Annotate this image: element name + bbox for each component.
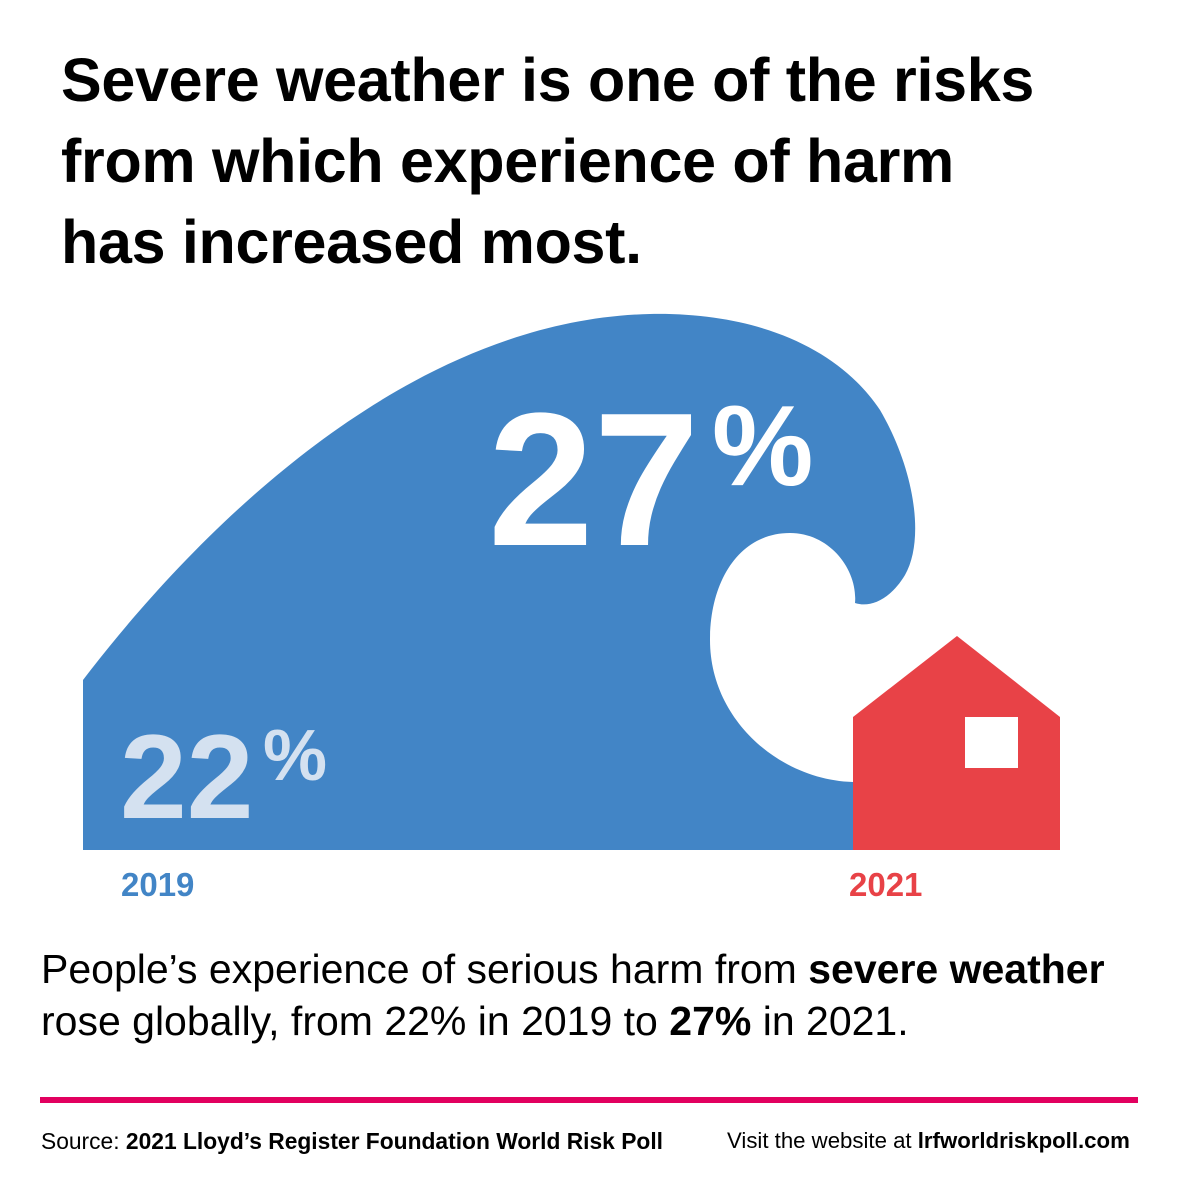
title: from which experience of harm (61, 127, 954, 195)
body text: People’s experience of serious harm from severe weather (41, 946, 1105, 992)
source footer: Source: 2021 Lloyd’s Register Foundation World Risk Poll (41, 1128, 663, 1154)
label: 27%: 27 (488, 374, 699, 586)
label: 22% (120, 710, 327, 844)
title (61, 46, 1034, 276)
title: Severe weather is one of the risks (61, 46, 1034, 114)
year label 2021: 2021 (849, 866, 922, 903)
label: 22%: 22 (120, 710, 253, 844)
body text: rose globally, from 22% in 2019 to 27% in 2021. (41, 998, 909, 1044)
body text (41, 946, 1105, 1044)
label: 22%: % (263, 716, 327, 796)
divider line (40, 1097, 1138, 1103)
year label 2019: 2019 (121, 866, 194, 903)
label: 27%: % (712, 383, 813, 510)
icon: house (853, 636, 1060, 850)
website footer: Visit the website at lrfworldriskpoll.com (727, 1128, 1130, 1153)
label: 27% (488, 374, 813, 586)
wave shape (83, 314, 915, 850)
title: has increased most. (61, 208, 642, 276)
